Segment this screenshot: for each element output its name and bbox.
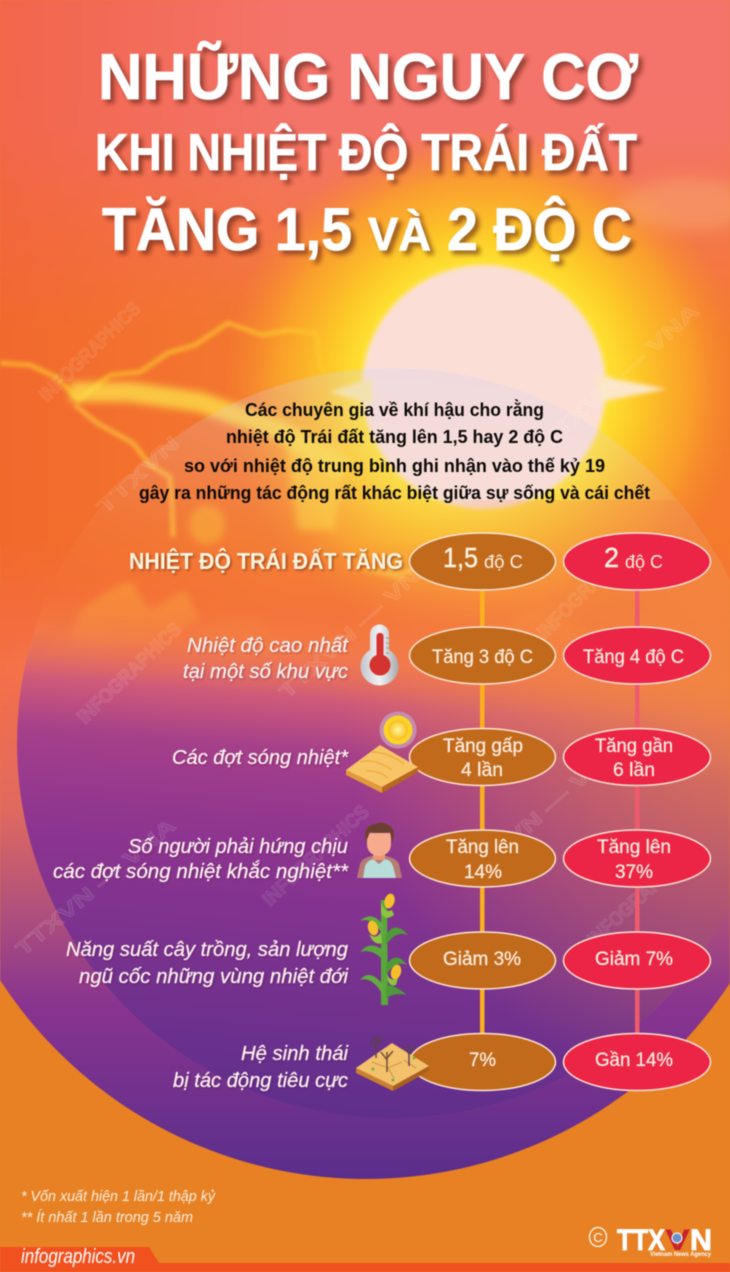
value 1,5	[410, 830, 556, 887]
icon: dry cracked land with dead trees	[356, 1036, 429, 1091]
intro text block	[139, 399, 650, 503]
value 1,5: Tăng lên	[446, 837, 519, 858]
value 1,5	[410, 728, 556, 786]
value 2	[564, 1034, 710, 1090]
row 5: ecosystems	[173, 1034, 710, 1092]
column header: 2 do C: độ C	[625, 552, 663, 572]
value 1,5: 7%	[469, 1050, 496, 1071]
row 1 label: Nhiệt độ cao nhất	[187, 635, 349, 657]
row 4 label: ngũ cốc những vùng nhiệt đới	[79, 966, 349, 988]
row 3 label	[53, 836, 349, 883]
title	[95, 40, 639, 263]
value 1,5	[410, 932, 556, 989]
value 1,5: Giảm 3%	[443, 949, 521, 970]
logo wordmark	[617, 1224, 712, 1258]
value 2: Tăng 4 độ C	[583, 647, 684, 668]
watermarks: TTXVN — VNA	[462, 738, 626, 887]
connector line: 2 degree column	[635, 590, 640, 1035]
column header: 1,5 do C	[410, 533, 556, 590]
watermarks: TTXVN	[93, 432, 184, 519]
footnotes: ** Ít nhất 1 lần trong 5 năm	[21, 1209, 193, 1226]
watermarks: INFOGRAPHICS	[584, 845, 696, 951]
row 5 label: Hệ sinh thái	[241, 1043, 349, 1065]
value 2: Gần 14%	[595, 1050, 673, 1071]
logo wordmark: N	[690, 1224, 712, 1257]
value 2: Giảm 7%	[595, 949, 673, 970]
icon: corn plant	[360, 892, 408, 1005]
value 1,5: Tăng 3 độ C	[432, 647, 533, 668]
background: outer circle	[0, 307, 730, 1179]
row 5 label	[173, 1043, 349, 1092]
title: TĂNG 1,5	[102, 196, 352, 263]
column header: 1,5 do C: độ C	[484, 552, 523, 572]
row 2 label: Các đợt sóng nhiệt*	[172, 747, 349, 769]
TTXVN logo with copyright	[590, 1224, 712, 1258]
value 1,5	[410, 627, 556, 684]
watermarks: TTXVN — VNA	[276, 551, 440, 704]
title: VÀ	[368, 208, 431, 260]
value 2: 37%	[615, 862, 653, 883]
background: inner purple circle	[0, 368, 730, 1150]
value 1,5	[410, 1034, 556, 1090]
row 4 label: Năng suất cây trồng, sản lượng	[66, 939, 348, 961]
row 5 label: bị tác động tiêu cực	[173, 1070, 348, 1092]
logo wordmark: Vietnam News Agency	[650, 1251, 711, 1258]
row 3 label: các đợt sóng nhiệt khắc nghiệt**	[53, 860, 349, 883]
value 2	[564, 627, 710, 684]
title: 2 ĐỘ C	[447, 196, 632, 263]
table heading: NHIỆT ĐỘ TRÁI ĐẤT TĂNG	[129, 547, 403, 574]
icon: person	[357, 823, 402, 878]
watermarks: TTXVN — VNA	[537, 300, 704, 454]
value 2	[564, 830, 710, 887]
connector line: 1,5 degree column	[480, 590, 484, 1035]
value 2: 6 lần	[613, 760, 655, 781]
watermarks: INFOGRAPHICS	[73, 618, 186, 729]
value 2: Tăng gần	[595, 736, 673, 757]
row 1: highest temperature	[183, 624, 710, 685]
value 1,5: 14%	[464, 862, 502, 883]
value 2: Tăng lên	[597, 837, 671, 858]
watermarks: INFOGRAPHICS	[35, 298, 146, 407]
column header: 2 do C: 2	[604, 542, 619, 573]
icon: thermometer	[360, 624, 399, 685]
intro text block: so với nhiệt độ trung bình ghi nhận vào thế kỷ 19	[184, 456, 605, 476]
intro text block: Các chuyên gia về khí hậu cho rằng	[245, 399, 544, 420]
footnotes: * Vốn xuất hiện 1 lần/1 thập kỷ	[21, 1188, 216, 1205]
watermarks: TTXVN — VNA	[12, 815, 180, 961]
column header: 2 do C	[564, 533, 710, 590]
value 2	[564, 932, 710, 989]
background: sun disc	[330, 265, 666, 509]
footer ribbon with site name	[0, 1246, 730, 1272]
title: KHI NHIỆT ĐỘ TRÁI ĐẤT	[95, 123, 637, 182]
footer ribbon with site name: infographics.vn	[21, 1246, 135, 1268]
footnotes	[21, 1188, 216, 1226]
watermarks	[12, 298, 704, 961]
column header: 1,5 do C: 1,5	[443, 542, 478, 573]
watermarks: INFOGRAPHICS	[258, 801, 374, 911]
logo wordmark: TTX	[617, 1224, 665, 1257]
intro text block: gây ra những tác động rất khác biệt giữa sự sống và cái chết	[139, 483, 650, 503]
row 1 label	[183, 635, 349, 683]
value 1,5: Tăng gấp	[443, 736, 523, 757]
logo wordmark: V	[665, 1224, 690, 1257]
value 2	[564, 728, 710, 786]
background: sunset clouds	[0, 323, 600, 690]
copyright mark: C	[593, 1230, 603, 1245]
intro text block: nhiệt độ Trái đất tăng lên 1,5 hay 2 độ C	[226, 427, 563, 447]
row 2: heat waves	[172, 712, 710, 793]
value 1,5: 4 lần	[461, 760, 503, 781]
watermarks: INFOGRAPHICS	[533, 531, 645, 644]
row 1 label: tại một số khu vực	[183, 661, 348, 683]
row 4 label	[66, 939, 349, 988]
row 3 label: Số người phải hứng chịu	[128, 836, 348, 858]
icon: sun over hot plate	[346, 712, 418, 793]
row 4: crop yields	[66, 892, 710, 1005]
row 3: people exposed	[53, 823, 710, 887]
title: NHỮNG NGUY CƠ	[98, 40, 639, 113]
